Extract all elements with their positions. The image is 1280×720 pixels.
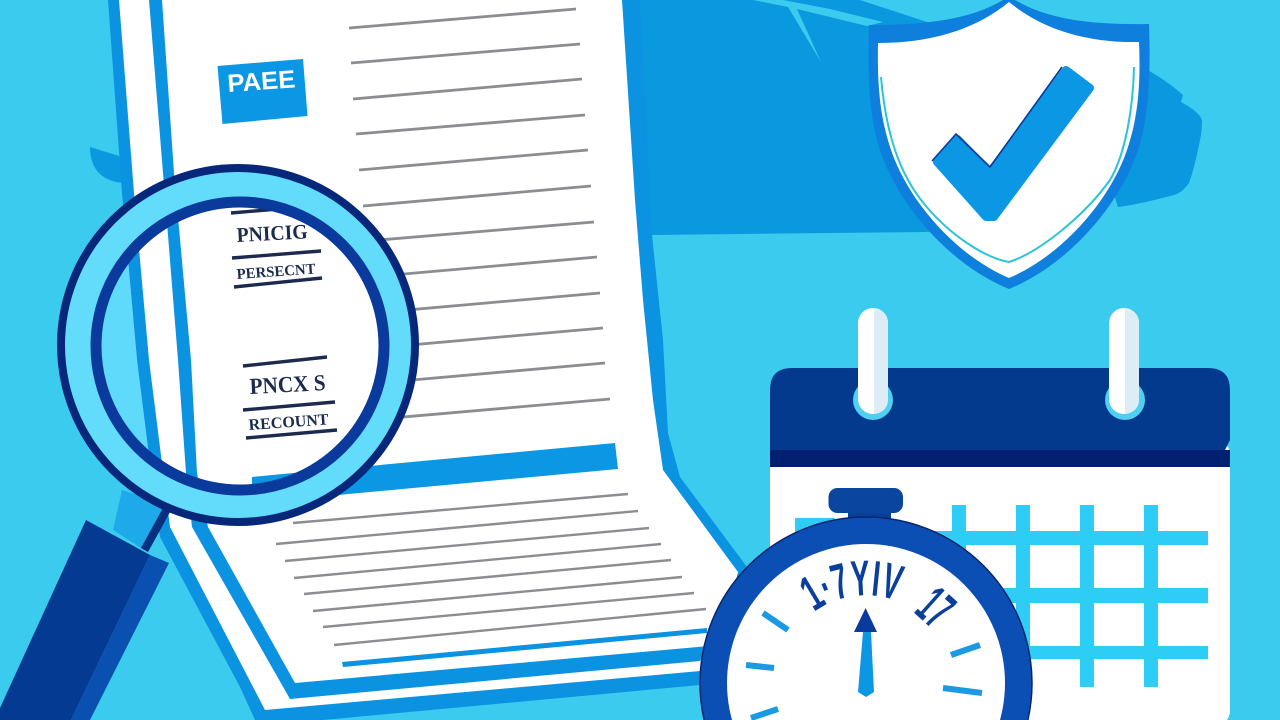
- stopwatch crown: [828, 488, 903, 522]
- dial ticks: [746, 613, 982, 718]
- magnified label 2: RECOUNT: [248, 411, 329, 434]
- text lines: lower: [276, 494, 706, 645]
- dial number: 17: [905, 576, 966, 639]
- checkmark: [932, 67, 1090, 217]
- calendar grid: [795, 505, 1208, 687]
- calendar ring right: [1105, 308, 1145, 420]
- shield: [868, 0, 1150, 289]
- dial text: 1·7YIV: [800, 560, 906, 611]
- footer bar: [342, 628, 707, 667]
- calendar: [770, 308, 1230, 720]
- calendar ring left: [853, 308, 893, 420]
- shield inner arc: [881, 67, 1134, 262]
- calendar header: [770, 368, 1230, 467]
- magnifier handle: [0, 490, 174, 720]
- lens view of document: [128, 208, 378, 484]
- badge: [218, 59, 308, 124]
- magnified label 2: [243, 357, 337, 438]
- magnified label 1: PERSECNT: [236, 262, 316, 283]
- magnified label 1: [231, 208, 322, 287]
- stopwatch hand: [854, 608, 877, 697]
- highlighted bar: [252, 443, 618, 503]
- text lines: upper: [349, 9, 610, 419]
- stopwatch: [699, 488, 1033, 720]
- badge: PAEE: [226, 65, 296, 98]
- magnified label 2: PNCX S: [249, 370, 326, 399]
- leaf shape behind document: [90, 147, 125, 183]
- document: [108, 0, 747, 720]
- magnifier lens: [61, 168, 420, 537]
- magnified label 1: PNICIG: [236, 219, 308, 247]
- backdrop: dark blue shape behind shield: [620, 0, 1202, 235]
